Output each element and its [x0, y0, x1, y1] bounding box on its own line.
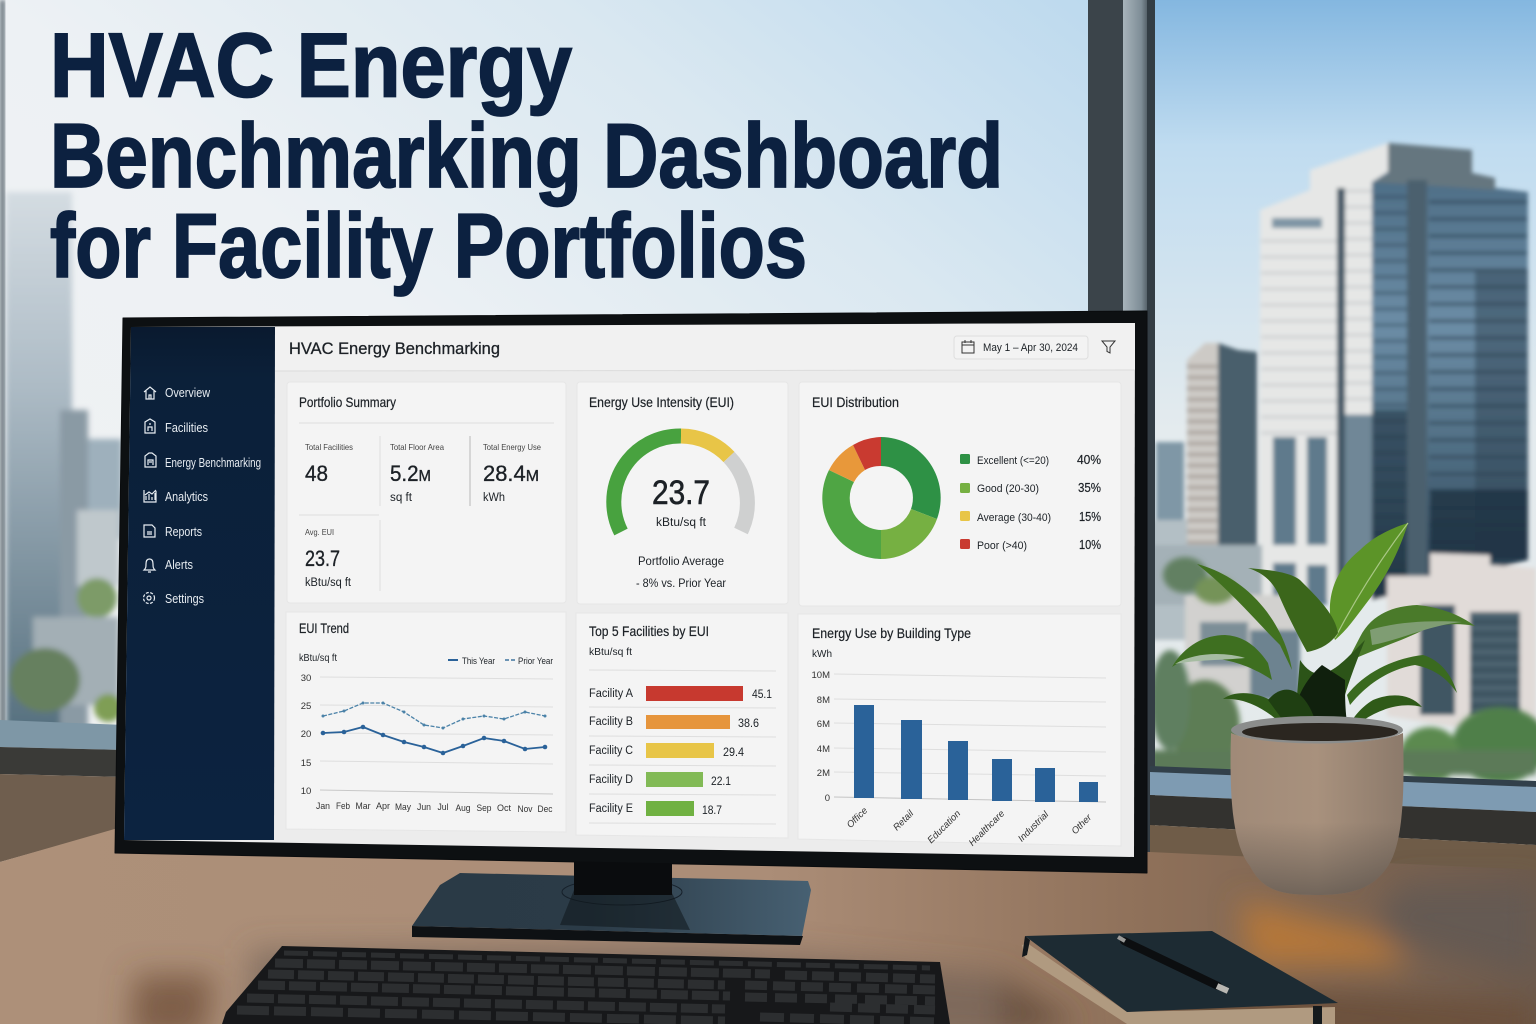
- nav: reports: Reports: [165, 525, 202, 539]
- panel: EUI gauge: 23.7: [652, 474, 710, 512]
- column chart: 6M: [817, 719, 830, 730]
- horizontal bars: Facility A: [589, 688, 633, 700]
- panel: energy use by building type: [798, 614, 1121, 849]
- title: HVAC Energy: [50, 16, 572, 116]
- panel: energy use by building type: Energy Use by Building Type: [812, 625, 971, 641]
- horizontal bars: [589, 686, 776, 824]
- panel: EUI trend: EUI Trend: [299, 620, 349, 636]
- column chart: 8M: [817, 695, 830, 706]
- panel: portfolio summary: Total Floor Area: [390, 442, 444, 452]
- line chart: Jun: [417, 802, 431, 813]
- sills: [0, 720, 125, 750]
- nav: energy benchmarking: [145, 453, 261, 470]
- notebook and pen: [1022, 931, 1338, 1024]
- panel: EUI gauge: Energy Use Intensity (EUI): [589, 394, 734, 410]
- panel: portfolio summary: [287, 382, 566, 603]
- horizontal bars: 45.1: [752, 689, 772, 701]
- legend: Poor (>40): [977, 540, 1027, 552]
- line chart: Nov: [518, 804, 533, 815]
- panel: EUI gauge: Portfolio Average: [638, 554, 724, 568]
- panel: EUI distribution: [799, 382, 1121, 606]
- nav: reports: [144, 525, 202, 539]
- nav: facilities: [145, 419, 208, 435]
- panel: EUI gauge: kBtu/sq ft: [656, 517, 707, 529]
- line chart: Aug: [456, 803, 470, 814]
- panel: portfolio summary: 48: [305, 461, 328, 486]
- column chart: 0: [825, 793, 830, 804]
- header bar: [275, 323, 1135, 371]
- column chart: [812, 670, 1106, 849]
- panel: portfolio summary: 28.4M: [483, 461, 539, 486]
- window frame: [1088, 0, 1123, 320]
- donut chart: [822, 437, 941, 559]
- line chart: Mar: [356, 801, 370, 812]
- column chart: Healthcare: [967, 808, 1007, 849]
- panel: portfolio summary: sq ft: [390, 492, 413, 504]
- nav: analytics: Analytics: [165, 490, 208, 504]
- panel: EUI gauge: - 8% vs. Prior Year: [636, 576, 726, 590]
- monitor: [115, 311, 1147, 873]
- legend: Excellent (<=20): [977, 455, 1049, 467]
- line chart: Dec: [538, 804, 553, 815]
- horizontal bars: 18.7: [702, 805, 722, 817]
- panel: portfolio summary: kWh: [483, 492, 505, 504]
- nav: alerts: [144, 558, 193, 572]
- title: [50, 16, 1003, 297]
- right city: [1150, 143, 1536, 740]
- column chart: Retail: [891, 808, 917, 833]
- column chart: 4M: [817, 744, 830, 755]
- horizontal bars: Facility B: [589, 716, 633, 728]
- horizontal bars: Facility D: [589, 774, 633, 786]
- horizontal bars: Facility E: [589, 803, 633, 815]
- potted plant: [1172, 523, 1475, 895]
- line chart: Sep: [476, 803, 492, 814]
- line chart: Jan: [316, 801, 330, 812]
- horizontal bars: Facility C: [589, 745, 633, 757]
- horizontal bars: 38.6: [738, 718, 759, 730]
- panel: portfolio summary: Total Facilities: [305, 442, 353, 452]
- trend legend: Prior Year: [518, 656, 553, 667]
- nav: alerts: Alerts: [165, 558, 193, 572]
- sidebar: [124, 327, 275, 840]
- line chart: 15: [301, 758, 311, 769]
- panel: top 5 facilities: Top 5 Facilities by EUI: [589, 623, 709, 639]
- column chart: 2M: [817, 768, 830, 779]
- nav: settings: [144, 592, 204, 606]
- nav: settings: Settings: [165, 592, 204, 606]
- title: for Facility Portfolios: [50, 196, 807, 297]
- panel: top 5 facilities: kBtu/sq ft: [589, 646, 632, 658]
- panel: EUI gauge: [577, 382, 788, 604]
- legend: 15%: [1079, 510, 1101, 524]
- panel: EUI distribution: EUI Distribution: [812, 394, 899, 410]
- column chart: Other: [1070, 812, 1095, 837]
- legend: [960, 453, 1101, 552]
- nav: analytics: [144, 490, 208, 504]
- line chart: 10: [301, 786, 311, 797]
- panel: portfolio summary: Portfolio Summary: [299, 394, 396, 410]
- panel: portfolio summary: Avg. EUI: [305, 527, 334, 537]
- line chart: Jul: [438, 802, 448, 813]
- legend: Average (30-40): [977, 512, 1051, 524]
- desk: [0, 826, 1536, 1024]
- desk light and shadow: [130, 885, 1536, 1024]
- legend: 10%: [1079, 538, 1101, 552]
- line chart: Feb: [336, 801, 350, 812]
- horizontal bars: 29.4: [723, 747, 745, 759]
- legend: Good (20-30): [977, 483, 1039, 495]
- column chart: Office: [845, 805, 870, 831]
- nav: overview: [144, 386, 211, 400]
- trend legend: [448, 656, 553, 667]
- pot: [1231, 716, 1404, 895]
- plant leaves: [1172, 523, 1475, 742]
- panel: energy use by building type: kWh: [812, 648, 832, 660]
- keyboard: [222, 946, 950, 1024]
- column chart: Industrial: [1016, 809, 1052, 844]
- line chart: Oct: [497, 803, 511, 814]
- line chart: 25: [301, 701, 311, 712]
- panel: portfolio summary: 5.2M: [390, 461, 431, 486]
- column chart: 10M: [812, 670, 830, 681]
- legend: 40%: [1077, 453, 1101, 467]
- nav: overview: Overview: [165, 386, 211, 400]
- line chart: Apr: [376, 801, 390, 812]
- title: Benchmarking Dashboard: [50, 106, 1003, 207]
- panel: EUI trend: kBtu/sq ft: [299, 653, 337, 664]
- legend: 35%: [1078, 481, 1101, 495]
- panel: portfolio summary: Total Energy Use: [483, 442, 541, 452]
- line chart: 20: [301, 729, 311, 740]
- line chart: [301, 673, 553, 815]
- gauge chart: [614, 436, 747, 532]
- panel: top 5 facilities: [576, 613, 788, 838]
- panel: EUI trend: [286, 612, 566, 832]
- line chart: May: [395, 802, 411, 813]
- nav: energy benchmarking: Energy Benchmarking: [165, 456, 261, 470]
- line chart: 30: [301, 673, 311, 684]
- horizontal bars: 22.1: [711, 776, 731, 788]
- nav: facilities: Facilities: [165, 421, 208, 435]
- monitor stand: [412, 855, 811, 945]
- panel: portfolio summary: 23.7: [305, 546, 340, 571]
- trend legend: This Year: [462, 656, 495, 667]
- left blurred city: [6, 192, 122, 732]
- column chart: Education: [925, 808, 963, 846]
- header bar: May 1 – Apr 30, 2024: [983, 342, 1078, 354]
- panel: portfolio summary: kBtu/sq ft: [305, 577, 352, 589]
- header bar: HVAC Energy Benchmarking: [289, 339, 500, 358]
